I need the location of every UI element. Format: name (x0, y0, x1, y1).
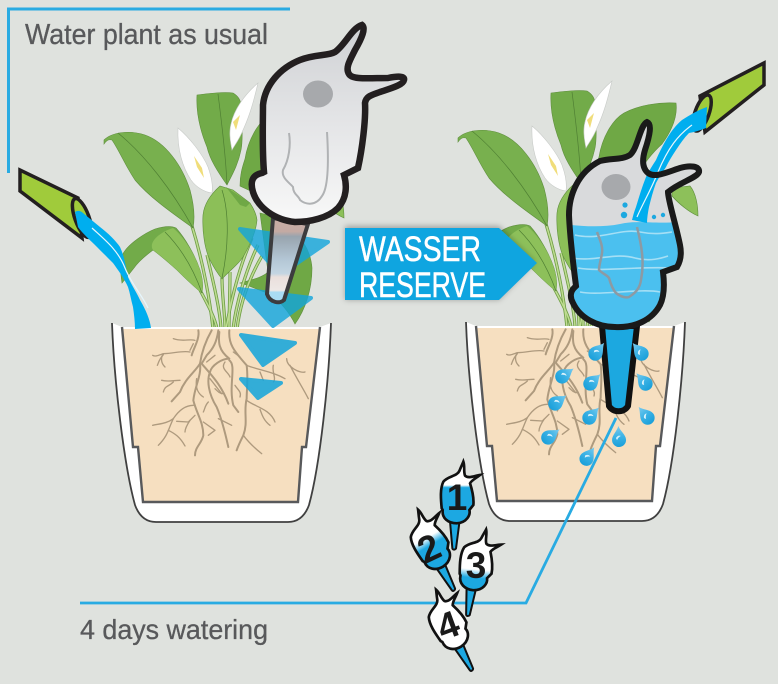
left plant roots (153, 330, 308, 455)
right plant (458, 81, 698, 327)
mini bottle 3: 3 (466, 545, 486, 586)
arrow label: wasser reserve: RESERVE (359, 266, 486, 305)
right pot with soil (466, 322, 685, 521)
left hose (20, 170, 96, 240)
mini bottle 1 (441, 462, 480, 550)
heading rule: water plant as usual (8, 9, 290, 173)
arrow label: wasser reserve (345, 226, 537, 305)
mini bottle 1: 1 (447, 477, 467, 518)
mini bottle 4: 4 (431, 603, 465, 648)
mini bottle 2: 2 (411, 526, 447, 571)
right watering bottle, filling (560, 107, 707, 411)
mini bottle 2 (399, 501, 476, 597)
leader line: 4 days watering (80, 418, 616, 603)
splash droplets (621, 202, 665, 219)
right hose (689, 63, 764, 133)
left watering bottle, empty (252, 25, 404, 302)
water drops in soil (538, 338, 658, 469)
arrow label: wasser reserve: WASSER (359, 230, 481, 269)
mini bottle 3 (455, 527, 503, 619)
left pot with soil (112, 323, 331, 522)
heading: water plant as usual: Water plant as usual (25, 19, 268, 51)
water flow triangles (239, 229, 328, 398)
right plant roots (507, 329, 662, 454)
caption: 4 days watering: 4 days watering (80, 614, 268, 645)
left water stream (75, 211, 151, 329)
mini bottle 4 (417, 581, 494, 677)
right water stream (632, 107, 707, 223)
left plant (104, 83, 344, 329)
